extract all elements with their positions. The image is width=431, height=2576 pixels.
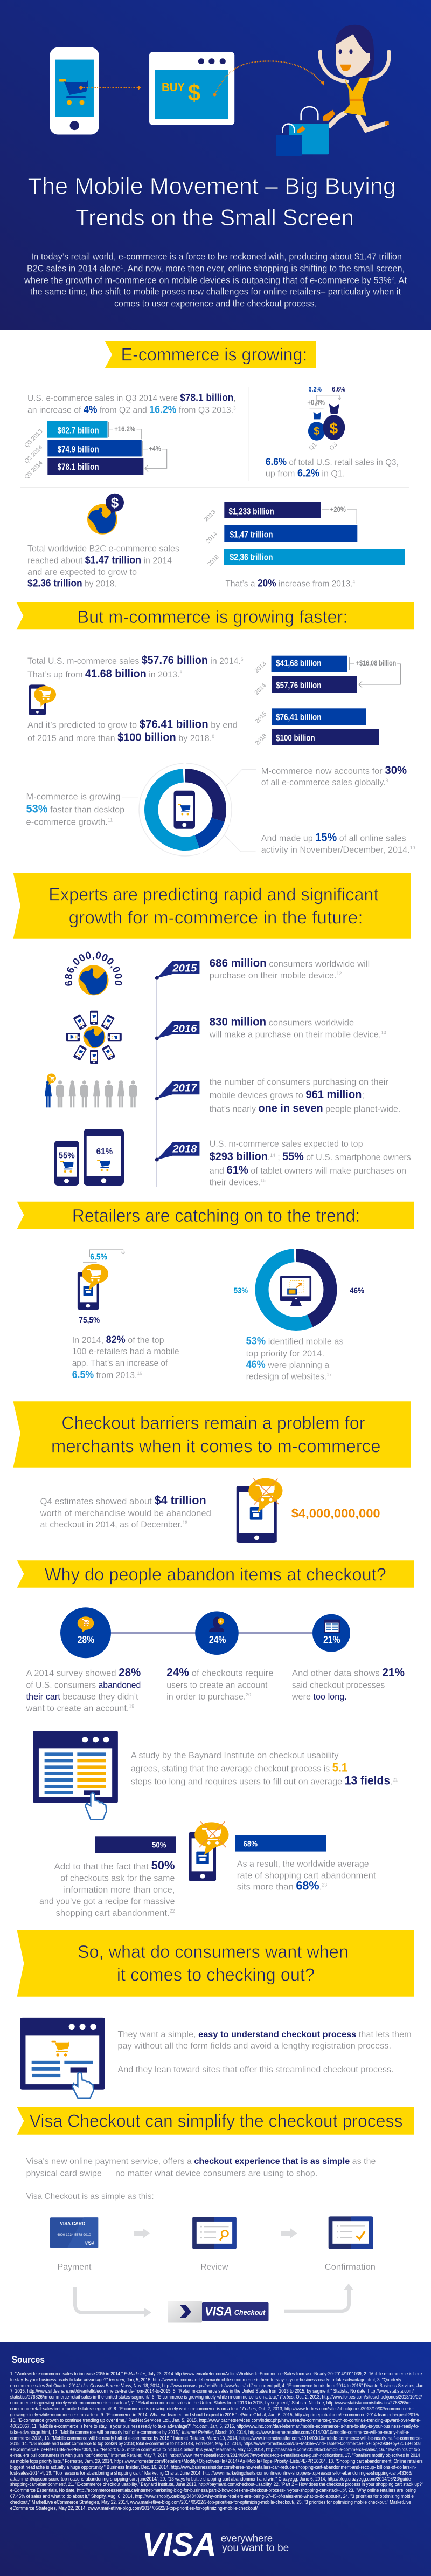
icon: smartphone and tablet: 61% — [96, 1147, 113, 1156]
bar chart: m-commerce sales: +$16,08 billion — [356, 659, 396, 667]
icon: phone with shopping app: 75,5% — [79, 1316, 100, 1325]
flag: 2015 — [155, 961, 199, 980]
text block: 2018: their devices. — [210, 1177, 263, 1188]
text block: introduction: . At — [394, 275, 407, 286]
text block: m-commerce sales: That’s up from 41.68 billion in 2013. — [27, 668, 182, 680]
heading: m-commerce: But m-commerce is growing faster: — [77, 607, 347, 627]
bar chart: m-commerce sales: 2015 — [254, 711, 268, 725]
text block: m-commerce sales — [27, 654, 244, 680]
arrow: payment to Visa Checkout — [75, 2287, 151, 2317]
bar chart: worldwide sales: $2,36 trillion — [230, 552, 273, 562]
text block: 2018: 15 — [260, 1178, 266, 1183]
text block: worldwide sales: $2.36 trillion by 2018. — [27, 578, 117, 589]
text block: 28 percent: 19 — [129, 1703, 134, 1709]
text block: worldwide sales: and are expected to grow to — [27, 567, 137, 577]
text block: 28 percent: of U.S. consumers abandoned — [26, 1680, 141, 1690]
circle: 28 percent: 28% — [78, 1635, 94, 1646]
icon: Visa card: VISA CARD — [60, 2221, 85, 2227]
icon: phone with cart bubble — [29, 684, 56, 715]
label: payment: Payment — [58, 2263, 92, 2272]
label: review: Review — [200, 2263, 228, 2272]
text block: Visa Checkout description: physical card swipe — no matter what device consumers are using to shop. — [26, 2169, 317, 2178]
text block: m-commerce 15 percent: And made up 15% of all online sales — [261, 831, 406, 844]
heading: checkout barriers — [13, 1401, 411, 1468]
circle: 24 percent: 24% — [209, 1635, 226, 1646]
text block: mobile apps: 6.5% from 2013. — [72, 1369, 140, 1381]
bar: 68 percent: 68% — [244, 1840, 258, 1849]
icon: phone with cart — [50, 47, 99, 135]
panel: what consumers want — [17, 1930, 414, 2098]
text block: 21 percent: were too long. — [291, 1691, 347, 1702]
text block: m-commerce sales: 5 — [241, 656, 244, 662]
text block: 2018: and 61% of tablet owners will make purchases on — [210, 1164, 406, 1176]
bar chart: worldwide sales: $1,233 billion — [228, 506, 274, 516]
icon: money bags: 6.2% — [308, 385, 322, 393]
arrow: review to confirmation — [281, 2228, 297, 2238]
text block: mobile priority: 53% identified mobile as — [246, 1336, 344, 1347]
bar chart: worldwide sales: +20% — [330, 505, 346, 513]
text block: 4 trillion: worth of merchandise would be abandoned — [40, 1508, 211, 1518]
text block: m-commerce forecast: 8 — [212, 734, 214, 739]
text block: source list: commerce-retail-sales-in-the-united-states-segment/, 8. "E-commerce is growing nicely while m-commerce is on a tear," Forbes, Oct. 2, 2013, http://www.forbes.com/sites/chuckjones/2013/10/02/ecommerce-is- — [10, 2406, 414, 2411]
heading: experts predict — [13, 873, 411, 939]
text block: 21 percent — [291, 1666, 405, 1702]
text block: m-commerce 53 percent: 53% faster than desktop — [26, 803, 124, 816]
circle: 21 percent — [312, 1614, 350, 1652]
icon: smartphone and tablet — [54, 1129, 124, 1186]
callout: 4 billion: $4,000,000,000 — [291, 1506, 380, 1520]
text block: 28 percent: their cart because they didn’t — [26, 1691, 138, 1702]
chart: website priority donut — [234, 1256, 364, 1324]
button: Visa Checkout — [168, 2301, 268, 2322]
text block: 2015: purchase on their mobile device. — [210, 970, 342, 981]
heading: what consumers want — [17, 1930, 414, 1997]
arrow: payment to review — [134, 2228, 150, 2238]
text block: mobile apps: app. That’s an increase of — [72, 1358, 168, 1368]
heading: m-commerce — [17, 602, 414, 629]
text block: 2017: the number of consumers purchasing on their — [210, 1077, 388, 1087]
arrow: dotted from browser to shopper — [213, 61, 324, 96]
flag: 2015: 2015 — [172, 963, 197, 975]
logo: Visa everywhere you want to be: you want to be — [222, 2543, 289, 2554]
text block: m-commerce forecast: of 2015 and more than $100 billion by 2018. — [27, 731, 214, 744]
heading: Visa Checkout: Visa Checkout can simplify the checkout process — [30, 2111, 403, 2130]
icon: money bags: Q1 — [308, 441, 318, 451]
text block: share of retail sales — [266, 456, 399, 479]
text block: 2018 — [210, 1139, 411, 1188]
text block: share of retail sales: up from 6.2% in Q1. — [266, 468, 345, 479]
text block: 68 percent: rate of shopping cart abandonment — [237, 1870, 376, 1880]
icon: phone with shopping app: 6.5% — [90, 1253, 107, 1262]
text block: 50 percent: and you’ve got a recipe for massive — [39, 1896, 175, 1906]
text block: 2018: 55% of U.S. smartphone owners — [282, 1150, 418, 1163]
text block: m-commerce forecast: And it’s predicted to grow to $76.41 billion by end — [27, 718, 238, 730]
text block: 4 trillion — [40, 1493, 211, 1530]
text block: what consumers want: They want a simple, easy to understand checkout process that lets them — [117, 2030, 412, 2039]
text block: 24 percent — [166, 1666, 274, 1702]
bar chart: m-commerce sales: 2013 — [253, 660, 267, 674]
text block: what consumers want — [117, 2030, 412, 2074]
text block: 50 percent: Add to that the fact that 50% — [54, 1859, 175, 1872]
text block: what consumers want: And they lean toward sites that offer this streamlined checkout process. — [117, 2065, 394, 2074]
text block: Baymard study: steps too long and requires users to fill out on average 13 fields. — [131, 1773, 393, 1787]
text block: m-commerce 30 percent: of all e-commerce sales globally. — [261, 777, 393, 787]
heading: experts predict: Experts are predicting rapid and significant — [48, 884, 379, 904]
text block: 4 trillion: at checkout in 2014, as of December. — [40, 1519, 191, 1530]
chart: website priority donut: 53% — [234, 1286, 248, 1296]
text block: Visa Checkout description — [26, 2157, 376, 2201]
bar chart: m-commerce sales: $57,76 billion — [276, 680, 321, 690]
bar: 50 percent: 50% — [152, 1841, 166, 1850]
icon: globe with arc number: 686,000,000,000 — [65, 951, 122, 986]
text block: m-commerce 53 percent: 11 — [108, 817, 113, 823]
icon: phone with crossed cart — [189, 1821, 228, 1881]
text block: 68 percent: As a result, the worldwide average — [237, 1859, 369, 1869]
icon: money bags: 6.6% — [332, 385, 345, 393]
panel: hero — [0, 0, 431, 330]
arrow: Visa Checkout to confirmation — [284, 2284, 353, 2311]
icon: Visa card — [50, 2217, 98, 2248]
icon: money bags: $ — [314, 426, 319, 437]
text block: mobile priority: redesign of websites. — [246, 1372, 332, 1382]
text block: m-commerce 15 percent: activity in November/December, 2014. — [261, 845, 416, 855]
icon: Visa card: VISA — [85, 2241, 95, 2246]
text block: 24 percent: 24% of checkouts require — [166, 1666, 274, 1678]
icon: globe with dollar: $ — [111, 495, 119, 511]
heading: sources: Sources — [12, 2354, 45, 2365]
text block: worldwide sales: Total worldwide B2C e-commerce sales — [27, 544, 179, 554]
heading: retailers: Retailers are catching on to the trend: — [72, 1205, 360, 1225]
text block: introduction: where the growth of m-commerce on mobile devices is outpacing that of e-commerce by 53% — [24, 275, 414, 286]
bar chart: quarterly sales — [23, 421, 167, 481]
heading: e-commerce is growing: E-commerce is growing: — [121, 344, 307, 364]
text block: source list: to stay. Is your business ready to take advantage?" Inc.com, Jan, 5, 2015, http://www.inc.com/dan-leberman/mobile-ecommerce-is-here-to-stay-is-your-business-ready-to-take-advantage.html, 3. "Quarterly — [10, 2377, 401, 2382]
text block: 2015: 686 million consumers worldwide will — [210, 957, 370, 970]
text block: Visa Checkout description: Visa's new online payment service, offers a checkout experience that is as simple as the — [26, 2157, 376, 2166]
text block: introduction: B2C sales in 2014 alone — [27, 263, 129, 274]
text block: what consumers want: pay without all the form fields and avoid a lengthy registration process. — [117, 2041, 391, 2051]
bar chart: worldwide sales: 2018 — [206, 554, 220, 568]
heading: what consumers want: it comes to checking out? — [117, 1965, 315, 1985]
text block: introduction: . And now, more then ever, online shopping is shifting to the small screen, — [123, 263, 405, 274]
flag: 2017: 2017 — [172, 1083, 198, 1094]
text block: 68 percent: 23 — [322, 1882, 327, 1887]
flag: 2016: 2016 — [172, 1023, 197, 1034]
text block: 28 percent: A 2014 survey showed 28% — [26, 1666, 141, 1678]
bar chart: quarterly sales: Q3 2013 — [23, 428, 44, 449]
bar chart: quarterly sales: $62.7 billion — [58, 425, 99, 435]
text block: 2015: 12 — [337, 971, 342, 976]
text block: introduction: comes to user experience and the checkout process. — [114, 298, 317, 309]
text block: m-commerce 30 percent — [261, 764, 407, 787]
text block: mobile priority: 17 — [326, 1372, 332, 1378]
heading: experts predict: growth for m-commerce in the future: — [69, 907, 363, 927]
panel: checkout barriers — [13, 1401, 411, 1543]
logo: Visa everywhere you want to be — [142, 2526, 289, 2563]
icon: money bags: $ — [330, 420, 338, 437]
panel: retailers catching on — [17, 1202, 414, 1382]
text block: mobile priority: top priority for 2014. — [246, 1348, 324, 1359]
bar chart: worldwide sales: 2013 — [203, 509, 217, 523]
flag: 2016 — [155, 1021, 199, 1040]
text block: US e-commerce sales: U.S. e-commerce sales in Q3 2014 were $78.1 billion, — [27, 392, 236, 403]
text block: m-commerce 15 percent — [261, 831, 415, 855]
icon: review — [192, 2217, 237, 2249]
text block: introduction: In today’s retail world, e-commerce is a force to be reckoned with, producing about $1.47 trillion — [31, 251, 402, 262]
bar chart: m-commerce sales: 2014 — [253, 682, 267, 696]
bar chart: worldwide sales: $1,47 trillion — [230, 530, 273, 540]
icon: money bags: +0,4% — [307, 398, 325, 407]
label: confirmation: Confirmation — [325, 2263, 376, 2272]
bar: 68 percent — [235, 1835, 326, 1852]
bar chart: quarterly sales: $74.9 billion — [58, 444, 99, 454]
text block: share of retail sales: 6.6% of total U.S. retail sales in Q3, — [266, 456, 399, 468]
text block: 21 percent: said checkout processes — [292, 1680, 385, 1690]
text block: 21 percent: And other data shows 21% — [292, 1666, 405, 1678]
text block: Baymard study: A study by the Baynard Institute on checkout usability — [131, 1750, 339, 1760]
text block: 2016: will make a purchase on their mobile device. — [210, 1029, 389, 1039]
text block: US e-commerce sales: 3 — [233, 405, 236, 410]
bar chart: m-commerce sales: $100 billion — [276, 732, 315, 743]
title: The Mobile Movement – Big Buying — [28, 174, 396, 200]
text block: introduction — [24, 251, 407, 309]
text block: 2016: 830 million consumers worldwide — [210, 1016, 354, 1029]
icon: browser with buy sign: BUY — [162, 80, 185, 94]
icon: phone with crossed cart — [237, 1478, 282, 1543]
text block: 2018: $293 billion. — [210, 1150, 271, 1163]
heading: checkout barriers: merchants when it comes to m-commerce — [51, 1436, 381, 1456]
icon: Visa card: 4000 1234 5678 9010 — [57, 2233, 91, 2237]
text block: introduction: the same time, the shift to mobile poses new challenges for online retailers– particularly when it — [30, 286, 401, 297]
text block: 28 percent — [26, 1666, 141, 1713]
button: Visa Checkout: VISA — [205, 2305, 232, 2319]
flag: 2018: 2018 — [172, 1144, 197, 1155]
heading: checkout barriers: Checkout barriers remain a problem for — [61, 1413, 365, 1433]
icon: happy shopper with bags — [276, 25, 389, 156]
bar chart: m-commerce sales: $41,68 billion — [276, 658, 321, 668]
bar chart: m-commerce sales: 2018 — [254, 732, 268, 746]
text block: introduction: 1 — [121, 264, 123, 270]
text block: 24 percent: 20 — [246, 1692, 251, 1697]
text block: mobile apps — [72, 1334, 179, 1381]
text block: 2017 — [210, 1077, 400, 1115]
icon: phone with shopping app — [78, 1250, 125, 1325]
icon: money bags — [307, 385, 345, 451]
text block: introduction: 2 — [391, 276, 394, 282]
logo: Visa everywhere you want to be: VISA — [142, 2526, 217, 2563]
flag: 2017 — [155, 1081, 199, 1100]
text block: 28 percent: want to create an account. — [26, 1703, 134, 1713]
text block: 2016: 13 — [381, 1030, 386, 1035]
text block: US e-commerce sales — [27, 392, 236, 415]
text block: 2017: mobile devices grows to 961 million; — [210, 1088, 364, 1101]
text block: 2017: that’s nearly one in seven people planet-wide. — [210, 1102, 400, 1115]
heading: retailers — [17, 1202, 414, 1229]
text block: m-commerce 30 percent: M-commerce now accounts for 30% — [261, 764, 407, 777]
text block: worldwide sales — [27, 544, 179, 589]
panel: predictions timeline — [13, 873, 418, 1188]
text block: 2015 — [210, 957, 370, 981]
text block: source list: take-advantage.html, 12. "Mobile commerce will be nearly half of e-commerce by 2015," Internet Retailer, March 10, 2014, https://www.internetretailer.com/2014/03/10/mobile-commerce-will-be-nearly-half-e- — [10, 2429, 409, 2435]
icon: row of people — [45, 1073, 137, 1107]
title — [28, 174, 396, 231]
bar chart: quarterly sales: +16.2% — [114, 424, 135, 433]
icon: browser form with hand — [33, 1731, 118, 1819]
bar chart: m-commerce sales — [253, 656, 400, 746]
chart: m-commerce donut — [122, 763, 256, 856]
heading: why abandon — [17, 1560, 414, 1588]
text block: m-commerce 15 percent: 10 — [410, 845, 415, 851]
bar chart: quarterly sales: +4% — [149, 444, 161, 453]
icon: money bags: Q3 — [328, 441, 338, 451]
arrow: dotted from phone to browser — [79, 86, 141, 90]
panel: m-commerce is growing faster — [17, 602, 415, 856]
panel: Visa Checkout — [17, 2107, 414, 2322]
text block: 50 percent: shopping cart abandonment. — [56, 1908, 172, 1918]
text block: 2016 — [209, 1016, 386, 1039]
text block: worldwide sales: reached about $1.47 trillion in 2014 — [27, 554, 172, 566]
text block: mobile priority — [246, 1336, 344, 1382]
text block: m-commerce sales: 6 — [179, 670, 182, 675]
text block: Baymard study: agrees, stating that the average checkout process is 5.1 — [131, 1760, 347, 1774]
text block: US e-commerce sales: an increase of 4% from Q2 and 16.2% from Q3 2013. — [27, 404, 238, 415]
circle: 28 percent — [60, 1607, 111, 1658]
icon: simple checkout browser — [20, 2018, 105, 2098]
text block: 20 percent increase: 4 — [353, 579, 355, 585]
bar chart: quarterly sales: Q3 2014 — [23, 460, 44, 481]
text block: mobile apps: 100 e-retailers had a mobile — [72, 1346, 179, 1356]
text block: mobile apps: In 2014, 82% of the top — [72, 1334, 164, 1346]
circle: 21 percent: 21% — [323, 1635, 340, 1646]
text block: mobile priority: 46% were planning a — [246, 1359, 330, 1371]
text block: 2018: ; — [275, 1152, 282, 1162]
bar chart: worldwide sales: 2014 — [205, 531, 219, 545]
text block: source list: eCommerce Strategies, May 22, 2014, zwww.marketlive-blog.com/2014/05/22/3-top-priorities-for-optimizing-mobile-checkout/ — [10, 2505, 258, 2511]
text block: mobile apps: 16 — [137, 1371, 142, 1376]
text block: Baymard study: 21 — [393, 1777, 398, 1782]
text block: source list — [10, 2371, 425, 2511]
heading: what consumers want: So, what do consumers want when — [78, 1942, 349, 1962]
text block: 2018: U.S. m-commerce sales expected to top — [210, 1139, 363, 1149]
circle: 24 percent — [195, 1611, 239, 1655]
text block: source list: statistics/276826/m-commerce-retail-sales-in-the-united-states-segment/, 6. "E-commerce is growing nicely while m-commerce is on a tear," Forbes, Oct. 2, 2013, http://www.forbes.com/sites/chuckjones/2013/10/02/ — [10, 2394, 422, 2400]
text block: 68 percent: sits more than 68%. — [237, 1879, 322, 1892]
icon: globe surrounded by phones — [66, 1011, 122, 1064]
heading: e-commerce is growing — [105, 341, 316, 368]
flag: 2018 — [155, 1142, 199, 1162]
bar: 50 percent — [95, 1836, 176, 1853]
bar chart: m-commerce sales: $76,41 billion — [276, 712, 321, 722]
logo: Visa everywhere you want to be: everywhere — [221, 2533, 273, 2545]
text block: 4 trillion: 18 — [183, 1520, 187, 1525]
text block: Visa Checkout description: Visa Checkout is as simple as this: — [26, 2192, 154, 2201]
button: Visa Checkout: Checkout — [234, 2308, 266, 2317]
icon: globe with dollar — [87, 494, 124, 535]
text block: 4 trillion: Q4 estimates showed about $4 trillion — [40, 1493, 206, 1507]
text block: 24 percent: users to create an account — [166, 1680, 268, 1690]
text block: 24 percent: in order to purchase. — [166, 1691, 251, 1702]
text block: 50 percent: of checkouts ask for the same — [60, 1873, 175, 1883]
text block: m-commerce sales: Total U.S. m-commerce sales $57.76 billion in 2014. — [27, 654, 243, 667]
text block: Baymard study — [131, 1750, 398, 1787]
icon: browser with buy sign: $ — [188, 80, 200, 106]
text block: 50 percent: 22 — [170, 1908, 175, 1914]
text block: m-commerce forecast — [27, 718, 238, 744]
chart: website priority donut: 46% — [350, 1286, 364, 1296]
title: Trends on the Small Screen — [75, 205, 354, 231]
text block: m-commerce 53 percent: e-commerce growth. — [26, 817, 109, 827]
text block: 20 percent increase: That’s a 20% increase from 2013. — [225, 578, 360, 590]
panel: sources footer — [0, 2342, 431, 2576]
text block: 50 percent — [39, 1859, 175, 1918]
text block: m-commerce 53 percent — [26, 791, 124, 827]
bar chart: quarterly sales: $78.1 billion — [58, 462, 99, 472]
bar chart: worldwide sales — [203, 502, 405, 568]
icon: browser with buy sign — [149, 52, 234, 125]
icon: confirmation — [329, 2216, 373, 2249]
text block: 50 percent: information more than once, — [64, 1885, 175, 1895]
bar chart: quarterly sales: Q2 2014 — [23, 444, 44, 465]
text block: m-commerce 30 percent: 9 — [386, 778, 388, 783]
heading: why abandon: Why do people abandon items at checkout? — [45, 1565, 386, 1585]
text block: 2018: 14 — [270, 1153, 275, 1158]
text block: m-commerce 53 percent: M-commerce is growing — [26, 791, 121, 801]
text block: 68 percent — [237, 1859, 376, 1892]
icon: smartphone and tablet: 55% — [59, 1151, 75, 1160]
panel: e-commerce is growing — [20, 341, 409, 590]
panel: why abandon — [17, 1560, 414, 1918]
